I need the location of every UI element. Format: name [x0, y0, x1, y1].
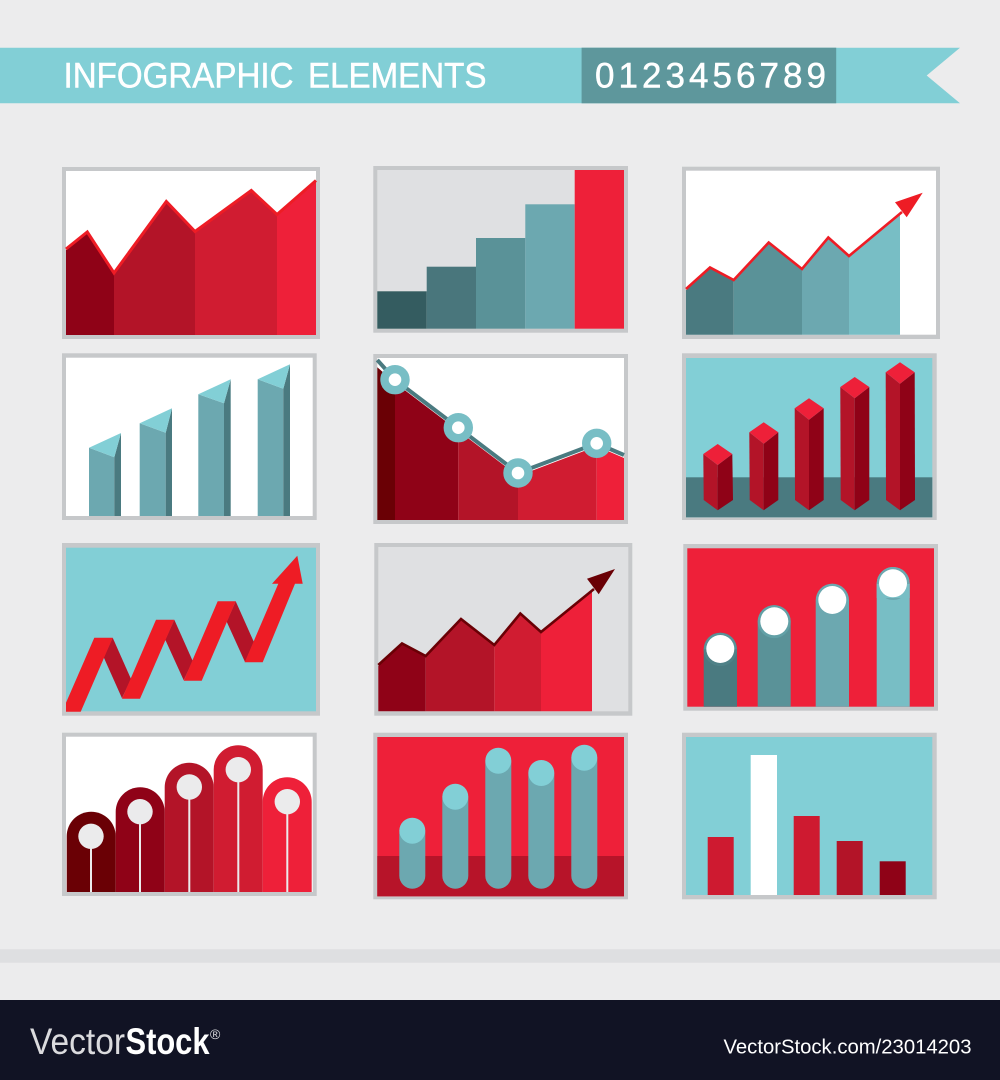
title: ELEMENTS [308, 56, 486, 95]
title: INFOGRAPHIC [64, 56, 294, 95]
pill 4 [877, 567, 910, 707]
arch 3 [165, 763, 214, 892]
title [64, 56, 486, 95]
ring markers [384, 369, 607, 484]
logo: Vector [30, 1020, 125, 1062]
cylinder 3 [485, 748, 511, 889]
pill 1 [704, 633, 737, 707]
logo: ® [210, 1026, 221, 1042]
ribbon shape [0, 48, 960, 103]
ribbon folds [104, 601, 254, 698]
bar 3 [795, 398, 824, 510]
bar 1 [89, 433, 121, 516]
arch 1 [67, 812, 116, 892]
arch 5 [263, 777, 312, 892]
header ribbon [0, 48, 960, 103]
bar 2 [749, 422, 778, 510]
panel: red arches with dots [62, 733, 317, 896]
number box [582, 48, 836, 103]
bar 1 [703, 444, 733, 510]
panel: simple bars on teal [682, 733, 937, 899]
panel: 3D teal wedge bars [62, 353, 317, 520]
pill 2 [758, 605, 791, 707]
pill 3 [816, 584, 849, 707]
bar 3 [198, 379, 231, 516]
cylinder 4 [528, 760, 554, 889]
logo [30, 1020, 221, 1062]
digits: 0123456789 [595, 56, 826, 95]
ribbon rises [66, 556, 303, 712]
trend line [377, 360, 624, 473]
logo: Stock [126, 1020, 210, 1062]
panel: area chart with dark arrow [374, 543, 632, 716]
cylinder 5 [571, 745, 597, 889]
panel: teal area chart with arrow [682, 167, 940, 339]
arch 2 [116, 787, 165, 892]
panel: area chart with ring markers [373, 354, 628, 524]
cylinder 1 [399, 818, 425, 889]
panel: 3D red isometric bars [682, 353, 937, 520]
bar 5 [886, 362, 915, 510]
line with arrow [686, 193, 923, 289]
panel: teal pills with white dots [683, 544, 938, 711]
panel: red area chart [62, 167, 320, 339]
bar 4 [258, 364, 290, 516]
source url: VectorStock.com/23014203 [724, 1036, 972, 1058]
panel: teal cylinders on red [373, 733, 628, 899]
bar 4 [840, 377, 869, 510]
line with arrow [378, 569, 615, 665]
panel: teal stepped bars [373, 166, 628, 333]
footer bar [0, 1000, 1000, 1080]
panel: zigzag ribbon arrow [62, 543, 320, 716]
arch 4 [214, 745, 263, 892]
cylinder 2 [442, 784, 468, 889]
bar 2 [140, 408, 172, 516]
